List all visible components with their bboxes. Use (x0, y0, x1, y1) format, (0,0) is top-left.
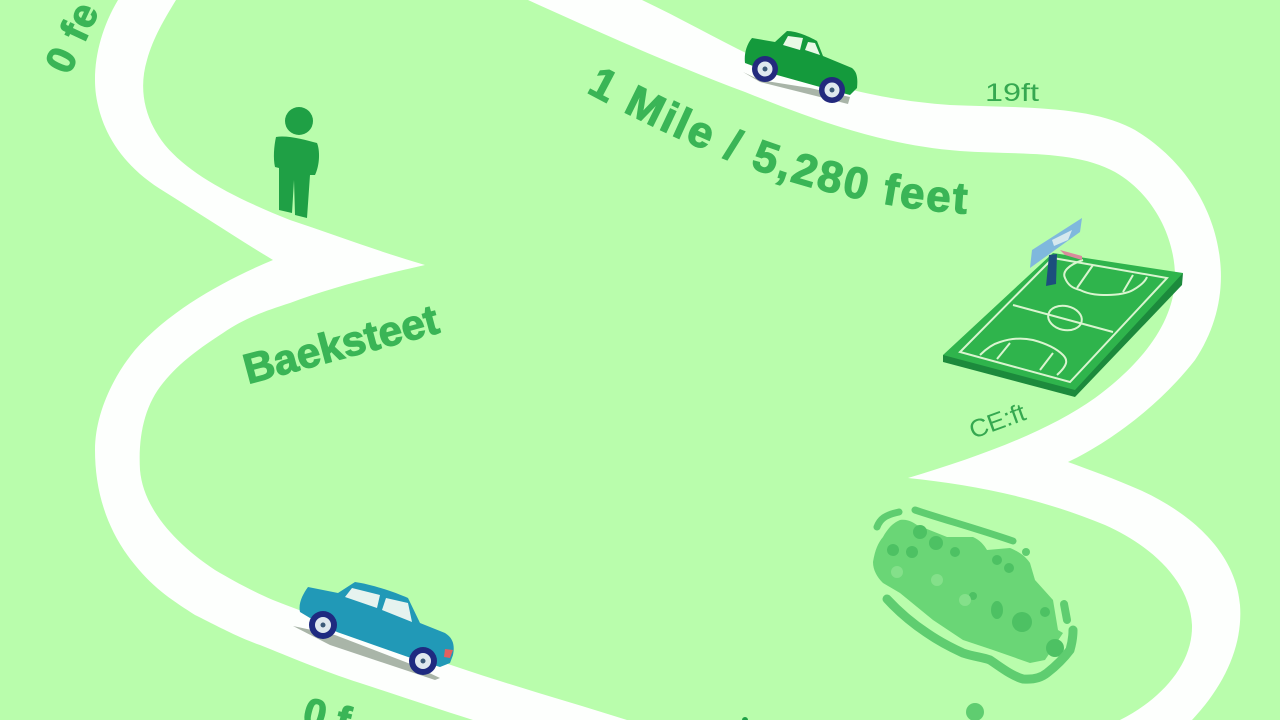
label: 1 Mile / 5,280 feet: 1 Mile / 5,280 feet (588, 70, 968, 214)
road: left winding section (95, 0, 627, 720)
label: Baeksteet: Baeksteet (238, 296, 444, 393)
icon: green marker dot (966, 703, 984, 720)
label: CE:ft: CE:ft (965, 398, 1030, 445)
road: right winding section (528, 0, 1240, 720)
icon: person (274, 107, 319, 218)
icon: sports field (943, 218, 1183, 397)
icon: green truck (743, 31, 857, 104)
icon: partial figure at bottom edge (742, 717, 748, 720)
icon: blue car (293, 582, 454, 680)
icon: pond with bushes (873, 510, 1073, 720)
label: 19ft: 19ft (985, 79, 1039, 107)
